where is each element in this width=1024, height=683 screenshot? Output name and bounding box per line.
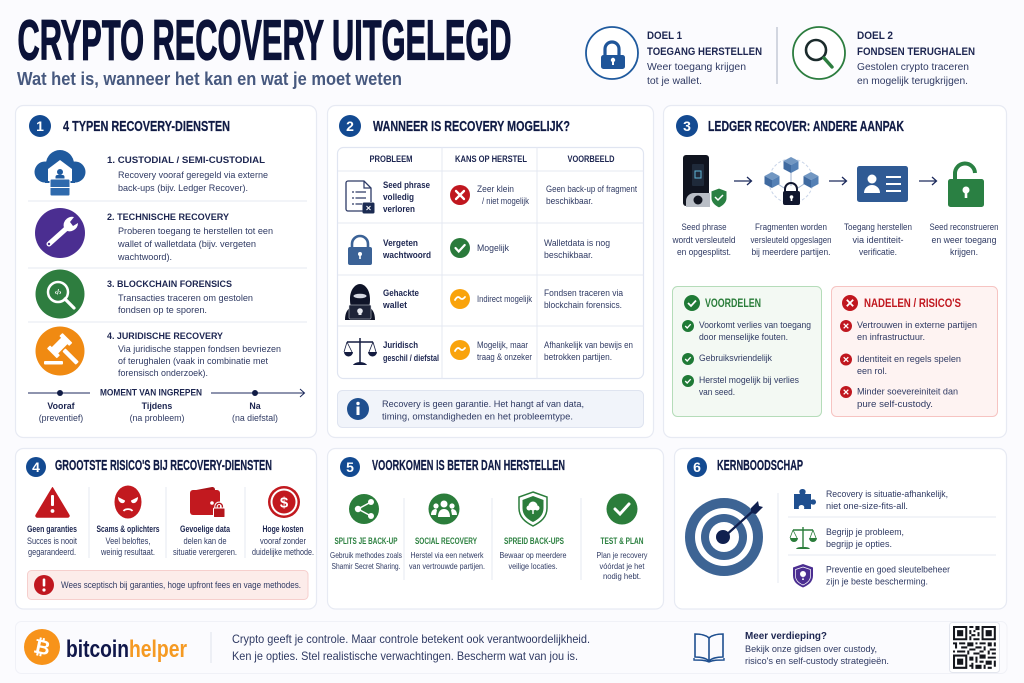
callout: geen garantie: timing, omstandigheden en het probleemtype. — [382, 412, 573, 422]
tip 4 text: Plan je recovery — [596, 550, 648, 560]
icon: shield — [519, 492, 547, 526]
flow captions: Seed reconstrueren — [930, 222, 999, 232]
row: gehackte wallet: Indirect mogelijk — [477, 294, 533, 304]
risk 4 text: duidelijke methode. — [252, 547, 314, 557]
row: seed phrase verloren: Zeer klein — [477, 184, 514, 194]
box: voordelen: VOORDELEN — [705, 296, 761, 310]
goal 2 text: en mogelijk terugkrijgen. — [857, 76, 968, 87]
table — [338, 147, 644, 379]
timeline: moment van ingrepen — [28, 386, 304, 423]
message 3: Preventie en goed sleutelbeheer — [826, 564, 951, 576]
type 3 text: 3. BLOCKCHAIN FORENSICS — [107, 279, 233, 290]
flow captions: wordt versleuteld — [672, 235, 736, 245]
row: gehackte wallet: Fondsen traceren via — [544, 288, 623, 298]
box: nadelen en risico's: Minder soevereiniteit dan — [857, 386, 958, 396]
risk 2 text — [96, 524, 160, 557]
icon: gavel — [36, 326, 85, 376]
type 2 text: 2. TECHNISCHE RECOVERY — [107, 212, 230, 223]
icon: share — [349, 494, 379, 524]
risk 1 text: Succes is nooit — [27, 536, 77, 546]
table header: KANS OP HERSTEL — [455, 154, 527, 164]
icon: forensics magnifier — [36, 270, 84, 318]
row: gehackte wallet — [345, 284, 623, 320]
row: vergeten wachtwoord: wachtwoord — [382, 250, 431, 260]
flow captions: Fragmenten worden — [755, 222, 827, 232]
logo: bitcoinhelper: ₿ — [32, 636, 52, 660]
goal 2 text: Gestolen crypto traceren — [857, 62, 969, 73]
type 3 text: Transacties traceren om gestolen — [118, 293, 253, 303]
heading 2: WANNEER IS RECOVERY MOGELIJK? — [373, 119, 570, 135]
message 3 — [793, 564, 951, 588]
timeline: moment van ingrepen: (preventief) — [39, 413, 83, 423]
icon: fragments network — [764, 157, 818, 205]
flow captions: versleuteld opgeslagen — [750, 235, 832, 245]
goal 1 text: TOEGANG HERSTELLEN — [647, 46, 762, 58]
icon: cloud — [34, 150, 86, 196]
type 2 text — [107, 212, 273, 262]
icon: lock — [586, 27, 638, 79]
box: nadelen en risico's: pure self-custody. — [857, 398, 933, 409]
icon: wrench — [35, 208, 85, 258]
tip 3 text — [500, 536, 567, 571]
message 1: Recovery is situatie-afhankelijk, — [826, 489, 948, 500]
heading 1 — [29, 115, 230, 137]
tip 3 text: veilige locaties. — [508, 561, 558, 571]
heading 2: 2 — [346, 118, 354, 134]
further reading text — [745, 630, 889, 666]
heading 2 — [339, 115, 570, 137]
tip 2 text: SOCIAL RECOVERY — [415, 536, 477, 546]
heading 5: 5 — [346, 459, 354, 475]
box: voordelen: Herstel mogelijk bij verlies — [699, 374, 799, 385]
icon: group — [428, 494, 460, 524]
type 3 text — [107, 279, 253, 315]
timeline: moment van ingrepen: (na diefstal) — [232, 413, 278, 423]
icon: ledger device — [683, 155, 727, 208]
flow captions: via identiteit- — [852, 235, 904, 245]
timeline: moment van ingrepen: Tijdens — [142, 401, 172, 411]
panel 4: grootste risico's — [16, 448, 316, 609]
flow captions: en opgesplitst. — [677, 247, 731, 257]
tip 2 text — [409, 536, 485, 571]
row: gehackte wallet: wallet — [382, 300, 407, 310]
row: juridisch geschil: Afhankelijk van bewijs en — [544, 340, 633, 350]
row: seed phrase verloren: Seed phrase — [383, 180, 430, 190]
box: nadelen en risico's — [832, 286, 998, 416]
arrow — [829, 177, 846, 185]
flow captions: Seed phrase — [682, 222, 727, 232]
heading 4: 4 — [32, 459, 40, 475]
icon: wallet with lock — [190, 487, 225, 518]
risk 4 text: vooraf zonder — [260, 536, 306, 546]
row: juridisch geschil — [344, 338, 633, 365]
title: CRYPTO RECOVERY UITGELEGD — [18, 8, 512, 72]
risk 1 text — [27, 524, 77, 557]
tip 3 text: SPREID BACK-UPS — [504, 536, 564, 546]
row: juridisch geschil: geschil / diefstal — [383, 353, 439, 363]
risk 2 text: Scams & oplichters — [96, 524, 160, 534]
icon: warning triangle — [36, 488, 69, 517]
goal 2: fondsen terughalen — [793, 27, 975, 87]
row: vergeten wachtwoord: Mogelijk — [477, 243, 510, 253]
risk 2 text: Veel beloftes, — [106, 536, 150, 546]
goal 1 text: DOEL 1 — [647, 30, 682, 42]
row: vergeten wachtwoord — [348, 236, 610, 265]
timeline: moment van ingrepen: (na probleem) — [130, 413, 184, 423]
risk 3 text — [173, 524, 237, 557]
table header: VOORBEELD — [568, 154, 615, 164]
tip 4 text: nodig hebt. — [603, 571, 641, 581]
message 2: Begrijp je probleem, — [826, 527, 904, 538]
goal 2 text: DOEL 2 — [857, 30, 893, 42]
type 2 text: wachtwoord). — [117, 252, 172, 262]
icon: forensics magnifier: ‹/› — [55, 290, 62, 296]
type 1 text: Recovery vooraf geregeld via externe — [118, 170, 268, 180]
icon: magnifier — [793, 27, 845, 79]
further reading text: risico's en self-custody strategieën. — [745, 655, 889, 666]
goal 2 text: FONDSEN TERUGHALEN — [857, 46, 975, 58]
further reading text: Meer verdieping? — [745, 630, 827, 642]
risk 3 text: delen kan de — [184, 536, 227, 546]
risk 3 text: situatie verergeren. — [173, 547, 237, 557]
icon: id card — [857, 166, 908, 202]
type 4 text: of terughalen (vaak in combinatie met — [118, 356, 268, 366]
goal 1: toegang herstellen — [586, 27, 762, 87]
message 2: begrijp je opties. — [826, 539, 892, 550]
icon: book — [694, 634, 724, 662]
heading 3: LEDGER RECOVER: ANDERE AANPAK — [708, 119, 904, 135]
risk 2 text: weinig resultaat. — [100, 547, 155, 557]
tip 4 text: vóórdat je het — [600, 561, 645, 571]
box: voordelen: door menselijke fouten. — [699, 331, 788, 342]
box: voordelen: Voorkomt verlies van toegang — [699, 319, 811, 330]
type 1 text — [107, 155, 268, 193]
row: juridisch geschil: betrokken partijen. — [544, 352, 612, 362]
flow captions — [672, 222, 999, 257]
box: nadelen en risico's: en infrastructuur. — [857, 331, 925, 342]
heading 1: 4 TYPEN RECOVERY-DIENSTEN — [63, 119, 230, 135]
tip 2 text: van vertrouwde partijen. — [409, 561, 485, 571]
risk 4 text — [252, 524, 314, 557]
row: gehackte wallet: Gehackte — [383, 288, 419, 298]
logo: bitcoinhelper — [24, 629, 187, 665]
icon: open lock — [948, 163, 984, 207]
risk 1 text: gegarandeerd. — [28, 547, 76, 557]
footer — [16, 622, 1007, 674]
goal 1 text — [647, 30, 762, 87]
type 3 text: fondsen op te sporen. — [118, 305, 207, 315]
timeline: moment van ingrepen: MOMENT VAN INGREPEN — [100, 386, 202, 398]
type 1 text: back-ups (bijv. Ledger Recover). — [118, 183, 248, 193]
heading 6: 6 — [693, 459, 701, 475]
panel 1: 4 typen recovery-diensten — [16, 106, 316, 438]
callout: geen garantie: Recovery is geen garantie. Het hangt af van data, — [382, 399, 584, 410]
heading 5 — [340, 457, 565, 477]
tip 1 text: SPLITS JE BACK-UP — [334, 536, 398, 546]
panel 3: ledger recover — [664, 106, 1006, 438]
callout: geen garantie — [338, 390, 644, 428]
box: nadelen en risico's: Vertrouwen in externe partijen — [857, 319, 977, 330]
risk 1 text: Geen garanties — [27, 524, 77, 534]
row: juridisch geschil: Mogelijk, maar — [477, 340, 528, 350]
QR code — [950, 622, 1000, 672]
tip 3 text: Bewaar op meerdere — [500, 550, 567, 560]
goal 1 text: Weer toegang krijgen — [647, 62, 746, 73]
box: voordelen — [672, 286, 822, 416]
icon: scammer mask — [114, 486, 142, 518]
heading 1: 1 — [36, 118, 44, 134]
message 2 — [790, 527, 904, 550]
message 1: niet one-size-fits-all. — [826, 501, 908, 512]
risk 4 text: Hoge kosten — [262, 524, 304, 534]
heading 4 — [26, 457, 272, 477]
heading 4: GROOTSTE RISICO'S BIJ RECOVERY-DIENSTEN — [55, 458, 272, 474]
type 4 text: forensisch onderzoek). — [118, 368, 208, 378]
arrow — [919, 177, 936, 185]
table header — [370, 154, 615, 164]
tip 1 text — [330, 536, 402, 571]
panel 6: kernboodschap — [674, 448, 1006, 609]
heading 5: VOORKOMEN IS BETER DAN HERSTELLEN — [372, 458, 565, 474]
row: gehackte wallet: blockchain forensics. — [544, 300, 622, 310]
logo: bitcoinhelper: helper — [129, 636, 187, 663]
table header: PROBLEEM — [370, 154, 413, 164]
arrow — [734, 177, 752, 185]
tip 4 text — [596, 536, 648, 581]
warning callout — [28, 570, 308, 600]
goal 2 text — [857, 30, 975, 87]
icon: dollar coin: $ — [280, 494, 289, 512]
box: nadelen en risico's: NADELEN / RISICO'S — [864, 296, 961, 310]
footer message: Ken je opties. Stel realistische verwachtingen. Bescherm wat van jou is. — [232, 649, 578, 663]
tip 2 text: Herstel via een netwerk — [410, 550, 484, 560]
row: seed phrase verloren: verloren — [383, 204, 415, 214]
box: nadelen en risico's: een rol. — [857, 365, 887, 376]
row: seed phrase verloren — [346, 180, 637, 214]
heading 6: KERNBOODSCHAP — [717, 458, 803, 474]
warning callout: Wees sceptisch bij garanties, hoge upfront fees en vage methodes. — [61, 579, 301, 590]
timeline: moment van ingrepen: Na — [249, 401, 261, 411]
row: vergeten wachtwoord: beschikbaar. — [544, 250, 593, 260]
flow captions: verificatie. — [859, 247, 897, 257]
type 4 text — [107, 331, 281, 378]
flow captions: bij meerdere partijen. — [752, 247, 830, 257]
icon: target with arrow — [685, 498, 763, 576]
flow captions: Toegang herstellen — [844, 222, 912, 232]
type 4 text: Via juridische stappen fondsen bevriezen — [118, 344, 281, 354]
type 1 text: 1. CUSTODIAL / SEMI-CUSTODIAL — [107, 155, 265, 166]
flow captions: en weer toegang — [932, 235, 997, 245]
heading 6 — [687, 457, 803, 477]
row: seed phrase verloren: beschikbaar. — [546, 196, 593, 206]
flow captions: krijgen. — [950, 247, 978, 257]
heading 3 — [676, 115, 904, 137]
box: voordelen: van seed. — [699, 386, 735, 397]
footer message — [232, 632, 590, 663]
row: vergeten wachtwoord: Vergeten — [383, 238, 418, 248]
tip 1 text: Gebruik methodes zoals — [330, 550, 402, 560]
row: seed phrase verloren: / niet mogelijk — [482, 196, 530, 206]
heading 3: 3 — [683, 118, 691, 134]
row: vergeten wachtwoord: Walletdata is nog — [544, 238, 610, 248]
risk 3 text: Gevoelige data — [180, 524, 230, 534]
logo: bitcoinhelper: bitcoin — [66, 636, 129, 663]
panel 2: wanneer is recovery mogelijk — [328, 106, 654, 438]
box: voordelen: Gebruiksvriendelijk — [699, 352, 772, 363]
tip 4 text: TEST & PLAN — [600, 536, 644, 546]
row: juridisch geschil: traag & onzeker — [477, 352, 532, 362]
further reading text: Bekijk onze gidsen over custody, — [745, 643, 877, 654]
box: nadelen en risico's: Identiteit en regels spelen — [857, 353, 961, 364]
icon: dollar coin — [268, 486, 300, 518]
timeline: moment van ingrepen: Vooraf — [47, 401, 75, 411]
goal 1 text: tot je wallet. — [647, 76, 702, 87]
row: seed phrase verloren: volledig — [383, 192, 414, 202]
type 2 text: Proberen toegang te herstellen tot een — [118, 226, 273, 236]
row: juridisch geschil: Juridisch — [383, 340, 418, 350]
panel 5: voorkomen is beter dan herstellen — [328, 448, 664, 609]
type 4 text: 4. JURIDISCHE RECOVERY — [107, 331, 224, 342]
message 3: zijn je beste bescherming. — [826, 576, 928, 588]
type 2 text: wallet of walletdata (bijv. vergeten — [117, 239, 256, 249]
tip 1 text: Shamir Secret Sharing. — [332, 561, 400, 571]
footer message: Crypto geeft je controle. Maar controle betekent ook verantwoordelijkheid. — [232, 632, 590, 646]
row: seed phrase verloren: Geen back-up of fragment — [546, 184, 637, 194]
subtitle: Wat het is, wanneer het kan en wat je moet weten — [17, 69, 402, 89]
message 1 — [794, 489, 948, 512]
icon: check — [606, 494, 638, 524]
